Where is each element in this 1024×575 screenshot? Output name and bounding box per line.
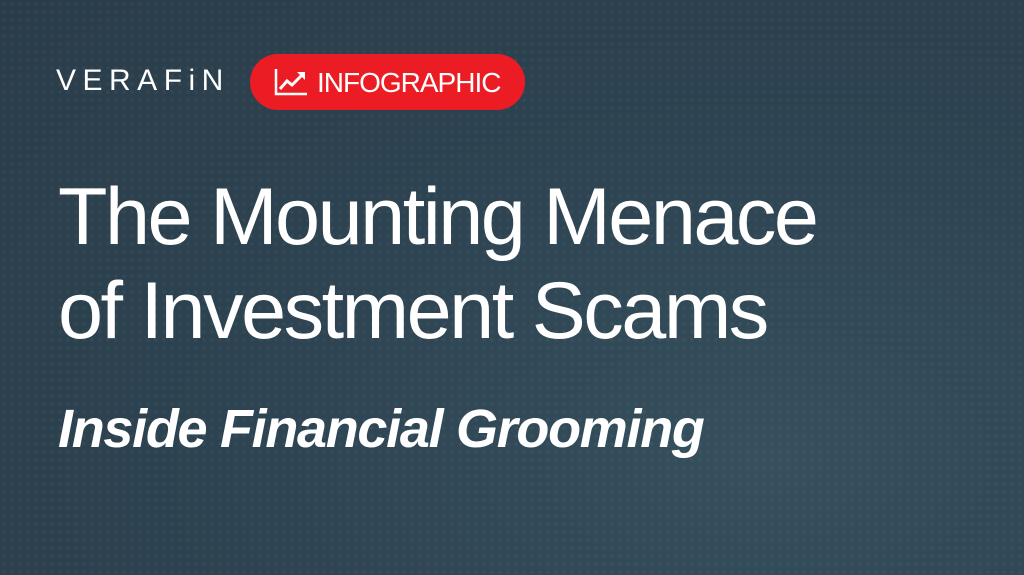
badge: infographic	[250, 54, 525, 110]
subtitle: Inside Financial Grooming	[58, 399, 704, 459]
badge: infographic: INFOGRAPHIC	[317, 67, 500, 98]
icon: chart	[274, 69, 307, 96]
title	[58, 172, 816, 356]
title: The Mounting Menace	[58, 172, 816, 262]
title: of Investment Scams	[58, 266, 767, 356]
logo: VERAFiN	[56, 64, 230, 97]
